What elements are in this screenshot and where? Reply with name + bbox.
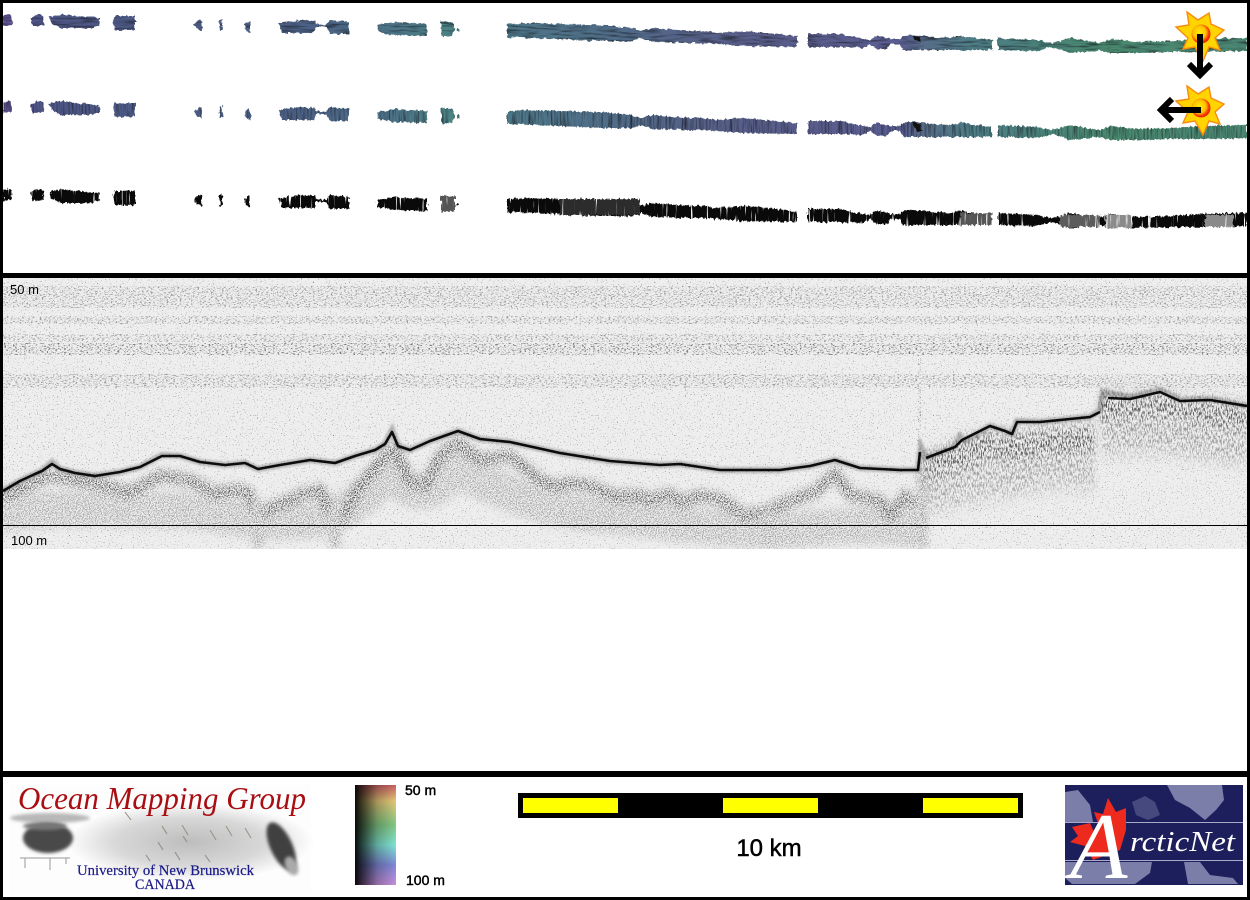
profile background (3, 278, 1247, 549)
strip: backscatter swath (3, 189, 1247, 228)
icon: sun illumination from east (1161, 86, 1224, 135)
scale label: 10 km (736, 835, 802, 862)
sub-seabed scattering (0, 442, 922, 549)
label: 50 m: 50 m (10, 282, 39, 297)
strip: swath coloured by depth, lit from north (3, 14, 1247, 53)
right-hand streaky scattering (924, 392, 1247, 495)
scale bar (518, 793, 1023, 862)
logo title: Ocean Mapping Group (18, 780, 306, 816)
panel: sonar swath strips (3, 12, 1247, 228)
seabed lines left (20, 858, 70, 870)
seabed image fade (65, 802, 315, 882)
pockmark marks (125, 812, 251, 862)
legend label: 100 m: 100 m (406, 872, 445, 888)
seabed reflector halo (3, 390, 1247, 491)
central band (1065, 822, 1243, 861)
seabed reflector line (3, 392, 1247, 491)
label: 100 m: 100 m (11, 533, 47, 548)
scallop shape left (10, 813, 90, 853)
strip: swath coloured by depth, lit from east (3, 101, 1247, 140)
colour depth legend (355, 782, 445, 888)
map land masses (1065, 785, 1238, 884)
yellow segments (523, 798, 1018, 813)
scallop shape right (260, 818, 305, 880)
logo country: CANADA (135, 877, 196, 893)
horizontal water column noise bands (3, 286, 1247, 460)
icon: sun illumination from north (1176, 12, 1224, 75)
logo university: University of New Brunswick (77, 863, 254, 879)
100 m depth line (3, 525, 1247, 526)
icon: maple leaf (1070, 798, 1126, 860)
logo backdrop (10, 785, 311, 893)
colour ramp (355, 785, 396, 885)
logo: Ocean Mapping Group (10, 780, 315, 893)
legend label: 50 m: 50 m (405, 782, 436, 798)
logo word: rcticNet (1130, 827, 1236, 858)
navy background (1065, 785, 1243, 885)
bar frame (518, 793, 1023, 818)
background noise (3, 278, 1247, 549)
logo big letter A: A (1064, 795, 1128, 899)
logo: ArcticNet (1064, 785, 1243, 899)
panel: sub-bottom seismic profile (0, 278, 1247, 549)
